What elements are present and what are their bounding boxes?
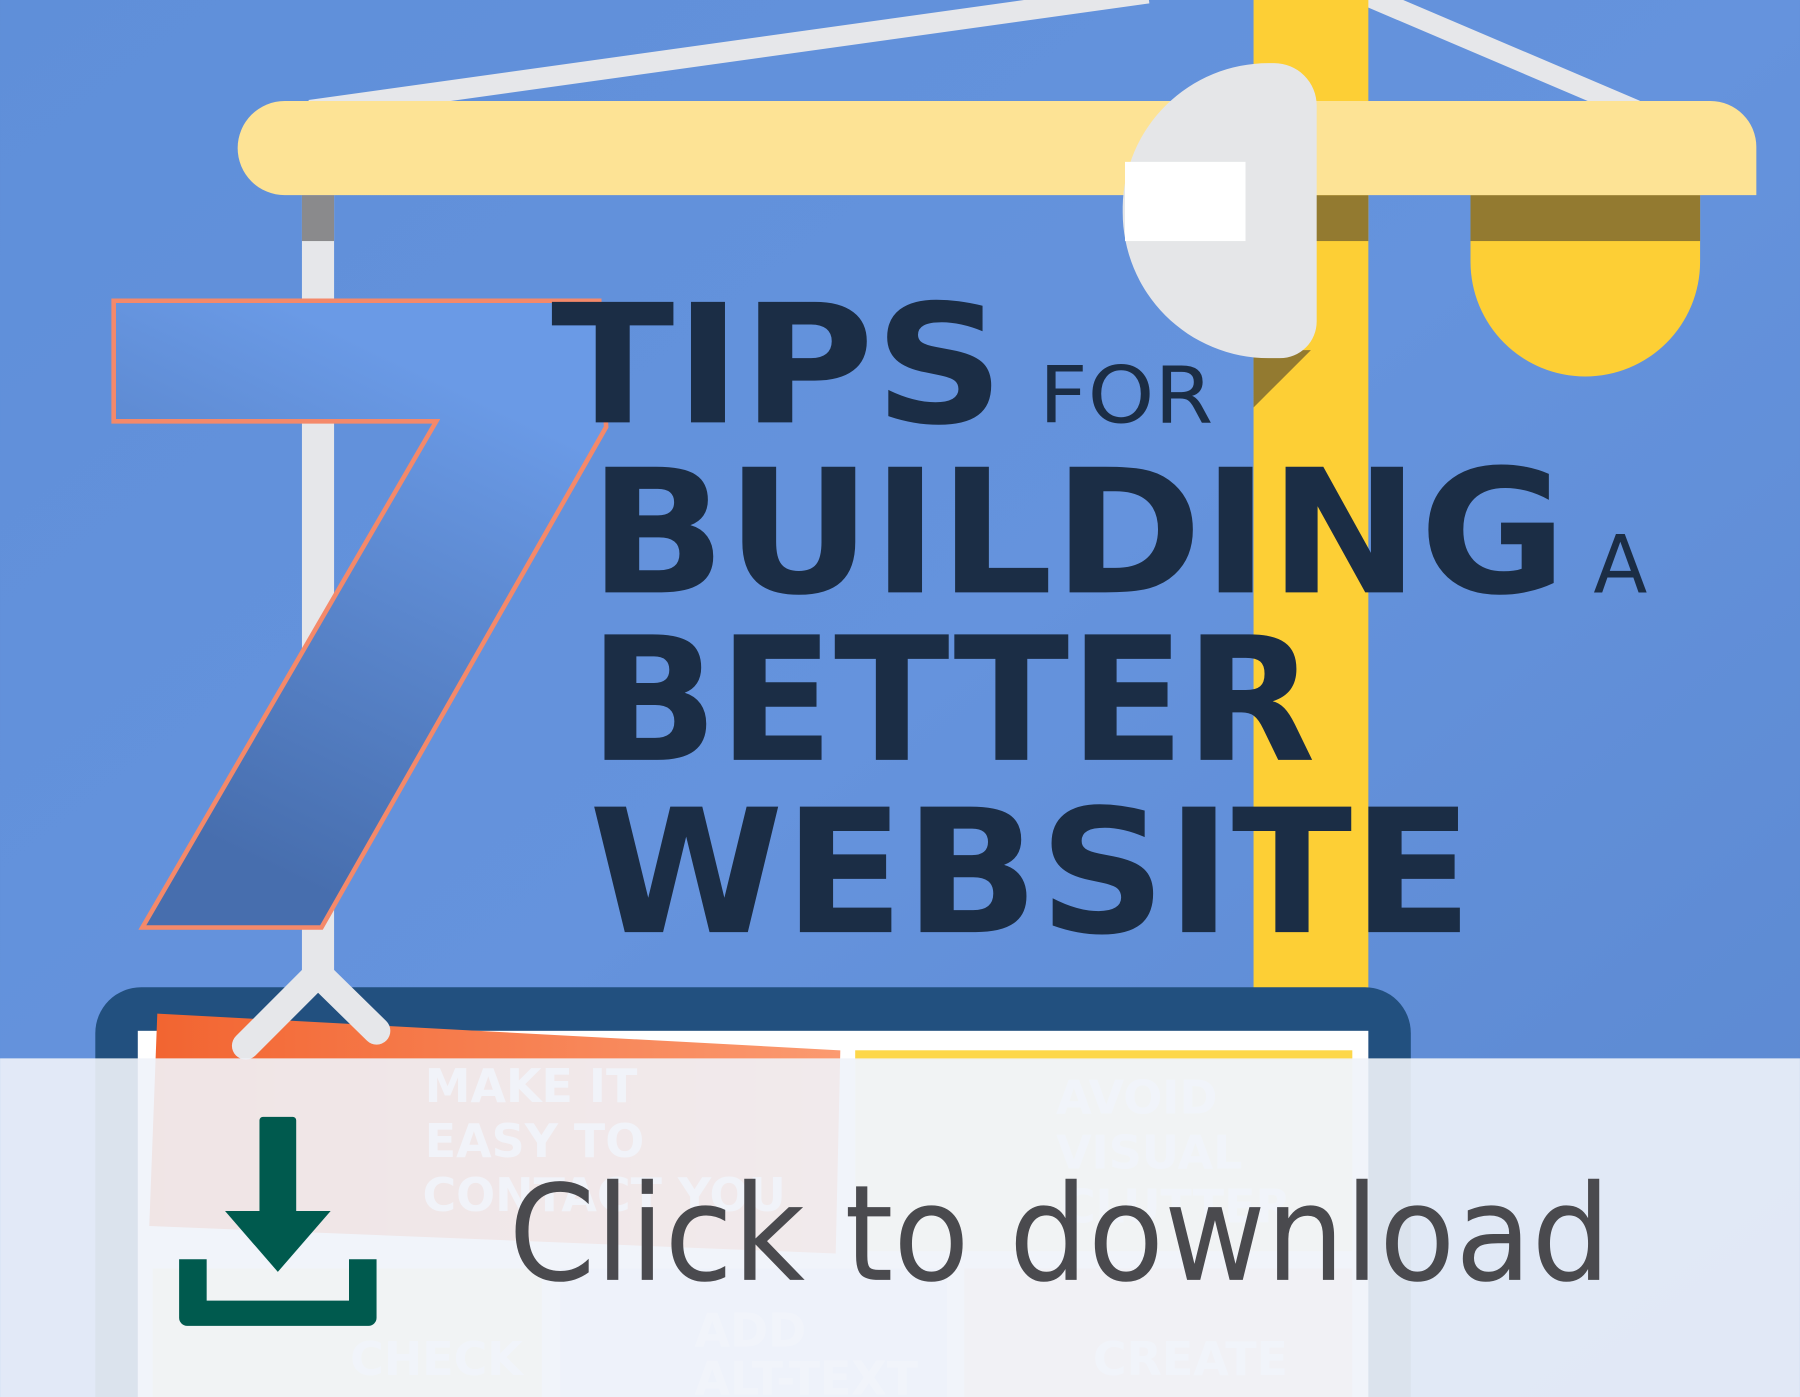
panel: avoid visual clutter: CLUTTER (1062, 1180, 1291, 1234)
panel: check (153, 1268, 542, 1397)
title: TIPS (551, 269, 1004, 461)
title: A (1593, 517, 1647, 611)
title (551, 269, 1647, 973)
title: BUILDING (589, 432, 1567, 633)
panel: add alt-text (560, 1268, 947, 1397)
text: click to download: Click to download (509, 1157, 1611, 1312)
panel: avoid visual clutter: AVOID (1056, 1070, 1217, 1124)
panel: avoid visual clutter (855, 1050, 1352, 1251)
crane jib (238, 101, 1756, 195)
overlay (0, 1058, 1800, 1397)
crane cables (310, 0, 1636, 110)
title: FOR (1039, 351, 1213, 441)
monitor (95, 987, 1411, 1397)
panel: avoid visual clutter: VISUAL (1056, 1126, 1242, 1180)
panel: make it easy to contact you (149, 1014, 840, 1254)
panel: make it easy to contact you: CONTACT YOU (422, 1168, 786, 1222)
panel: make it easy to contact you: EASY TO (425, 1114, 644, 1168)
title: WEBSITE (589, 772, 1473, 973)
panel: create (964, 1268, 1352, 1397)
hook cable (302, 195, 334, 976)
title: BETTER (589, 600, 1316, 801)
hook fork (246, 973, 377, 1046)
crane mast (1254, 0, 1368, 989)
crane cab (1123, 63, 1317, 408)
panel: create: CREATE (1093, 1332, 1288, 1386)
big number 7 (114, 301, 606, 928)
panel: make it easy to contact you: MAKE IT (425, 1059, 638, 1113)
panel: add alt-text: ADD (695, 1303, 806, 1357)
icon: download (179, 1117, 377, 1326)
panel: check: CHECK (350, 1332, 524, 1386)
crane counterweight (1471, 195, 1700, 377)
